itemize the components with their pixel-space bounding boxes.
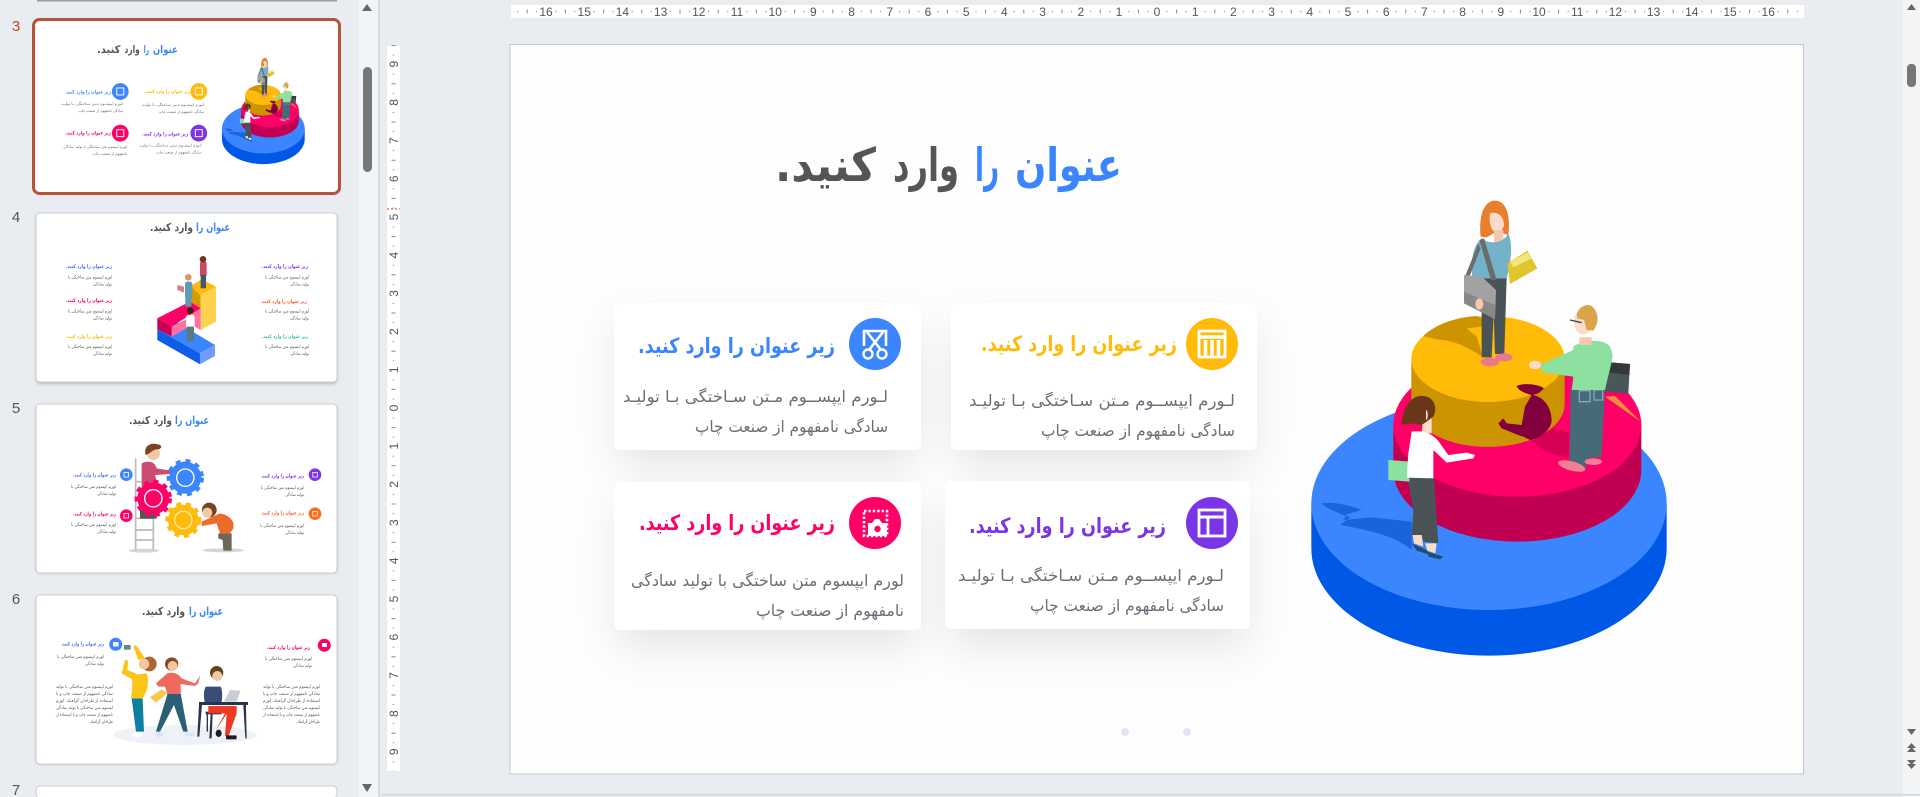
- thumbnail 7 partial: [36, 786, 337, 797]
- vertical ruler: 9: [387, 748, 401, 755]
- thumbnail 3: active slide: نامفهوم از صنعت چاپ: [93, 152, 127, 157]
- horizontal ruler: 15: [578, 5, 591, 19]
- vertical ruler: 6: [387, 175, 401, 182]
- panel: sidebar scrollbar: [359, 0, 380, 797]
- vertical ruler: 2: [387, 481, 401, 488]
- thumbnail 4: لورم ایپسوم متن ساختگی با: [68, 274, 112, 280]
- icon: gears, ladder and workers: [129, 444, 244, 553]
- thumbnail 6: استفاده از طراحان گرافیک. لورم: [263, 698, 320, 704]
- thumbnail 3: active slide: زیر عنوان را وارد کنید.: [65, 131, 111, 137]
- horizontal ruler: 6: [925, 5, 932, 19]
- card heading: زیر عنوان را وارد کنید.: [638, 334, 835, 358]
- vertical ruler: 9: [387, 61, 401, 68]
- vertical ruler: 0: [387, 404, 401, 411]
- thumbnail 4: لورم ایپسوم متن ساختگی با: [68, 344, 112, 350]
- thumbnail 6: سادگی نامفهوم از صنعت چاپ و با: [263, 691, 320, 697]
- thumbnail numbers: 3: [12, 18, 20, 35]
- thumbnail 4: تولید سادگی: [290, 282, 310, 288]
- vertical ruler: 7: [387, 672, 401, 679]
- thumbnail 3: active slide: سادگی نامفهوم از صنعت چاپ: [78, 108, 123, 114]
- icon: layout: [1186, 497, 1238, 549]
- thumbnail 6: وارد کنید.: [142, 605, 185, 618]
- thumbnail 4: لورم ایپسوم متن ساختگی با: [265, 274, 309, 280]
- panel: main slide canvas: [510, 44, 1804, 774]
- thumbnail 5: تولید سادگی: [97, 529, 117, 535]
- thumbnail 6: طراحان گرافیک.: [296, 719, 320, 725]
- thumbnail 4: [36, 213, 337, 384]
- thumbnail numbers: 6: [12, 591, 20, 608]
- horizontal ruler: 10: [769, 5, 782, 19]
- thumbnail 3: active slide: [34, 20, 340, 194]
- icon: isometric steps with people: [157, 256, 216, 364]
- person: man with laptop: [1529, 305, 1630, 474]
- horizontal ruler: 11: [1571, 5, 1584, 19]
- thumbnail 4: زیر عنوان را وارد کنید.: [262, 264, 308, 270]
- thumbnail 6: نامفهوم از صنعت چاپ و با استفاده از: [262, 713, 320, 718]
- thumbnail 6: ایپسوم متن ساختگی با تولید سادگی: [56, 705, 113, 711]
- thumbnail 5: زیر عنوان را وارد کنید.: [73, 512, 116, 518]
- horizontal ruler: [511, 5, 1804, 19]
- thumbnail 5: وارد کنید.: [129, 414, 172, 427]
- thumbnail 3: active slide: کنید.: [97, 43, 121, 56]
- horizontal ruler: 10: [1532, 5, 1546, 19]
- thumbnail 4: لورم ایپسوم متن ساختگی با: [265, 308, 309, 314]
- title: را: [975, 138, 999, 192]
- thumbnail 5: لورم ایپسوم متن ساختگی با: [71, 484, 116, 490]
- card heading: زیر عنوان را وارد کنید.: [981, 332, 1177, 356]
- horizontal ruler: 12: [1609, 5, 1622, 19]
- thumbnail 3: active slide: سادگی نامفهوم از صنعت چاپ: [159, 109, 204, 115]
- title: عنوان: [1015, 138, 1122, 192]
- thumbnail numbers: 4: [12, 209, 20, 226]
- card body text: نامفهوم از صنعت چاپ: [756, 601, 904, 621]
- thumbnail 4: عنوان را: [196, 221, 230, 234]
- thumbnail 4: زیر عنوان را وارد کنید.: [66, 334, 112, 340]
- horizontal ruler: 11: [731, 5, 744, 19]
- thumbnail 4: تولید سادگی: [93, 282, 113, 288]
- horizontal ruler: 14: [616, 5, 629, 19]
- thumbnail 6: تولید سادگی: [293, 663, 313, 669]
- panel: yellow card: [951, 303, 1257, 450]
- card body text: لـورم ایپســوم مـتن سـاختگی بـا تولیـد: [623, 387, 888, 407]
- horizontal ruler: 4: [1001, 5, 1008, 19]
- horizontal ruler: 13: [1647, 5, 1661, 19]
- card shadows: [620, 325, 1252, 645]
- vertical ruler: 7: [387, 137, 401, 144]
- thumbnail 5: زیر عنوان را وارد کنید.: [261, 474, 304, 480]
- vertical ruler: 1: [387, 366, 401, 373]
- horizontal ruler: 7: [886, 5, 893, 19]
- thumbnail 3: active slide: زیر عنوان را وارد کنید.: [65, 89, 111, 95]
- thumbnail 6: لورم ایپسوم متن ساختگی با تولید: [263, 684, 320, 690]
- thumbnail 4: تولید سادگی: [290, 316, 310, 322]
- card body text: [958, 566, 1224, 616]
- thumbnail 4: زیر عنوان را وارد کنید.: [66, 298, 112, 304]
- vertical ruler: 4: [387, 252, 401, 259]
- thumbnail 6: عنوان را: [189, 605, 223, 618]
- thumbnail 6: لورم ایپسوم متن ساختگی با تولید: [56, 684, 113, 690]
- vertical ruler: 8: [387, 99, 401, 106]
- thumbnail 6: نامفهوم از صنعت چاپ و با استفاده از: [55, 713, 113, 718]
- thumbnail numbers: 5: [12, 400, 20, 417]
- horizontal ruler: 3: [1268, 5, 1275, 19]
- title: [775, 138, 1122, 192]
- thumbnail 3: active slide: را: [144, 43, 149, 56]
- icon: three cartoon people: [113, 645, 257, 745]
- horizontal ruler: 2: [1077, 5, 1084, 19]
- panel: pink card: [614, 482, 921, 630]
- horizontal ruler: 9: [810, 5, 817, 19]
- vertical ruler: 8: [387, 710, 401, 717]
- card body text: لـورم ایپســوم مـتن سـاختگی بـا تولیـد: [969, 391, 1235, 411]
- pagination dots: [1121, 728, 1191, 736]
- vertical ruler: 4: [387, 557, 401, 564]
- thumbnail 3: active slide: زیر عنوان را وارد کنید.: [142, 131, 188, 137]
- thumbnail 3: active slide: لورم ایپسوم متن ساختگی با تولید سادگی: [63, 144, 127, 150]
- thumbnail 4: وارد کنید.: [150, 221, 193, 234]
- card body text: لـورم ایپســوم مـتن سـاختگی بـا تولیـد: [958, 566, 1224, 586]
- illustration: three-tier pyramid with people: [1311, 201, 1667, 656]
- person: woman with brown hair: [1388, 396, 1475, 559]
- horizontal ruler: 9: [1497, 5, 1504, 19]
- card body text: سادگی نامفهوم از صنعت چاپ: [695, 417, 888, 437]
- horizontal ruler: 6: [1383, 5, 1390, 19]
- title: کنید.: [775, 138, 876, 192]
- thumbnail 6: ایپسوم متن ساختگی با تولید سادگی: [263, 705, 320, 711]
- thumbnail 3: active slide: لـورم ایپســوم مـتن سـاختگی بـا تولیـد: [142, 102, 204, 108]
- card body text: [623, 387, 888, 437]
- horizontal ruler: 16: [1762, 5, 1775, 19]
- vertical ruler: 5: [387, 213, 401, 220]
- card heading: زیر عنوان را وارد کنید.: [969, 514, 1166, 538]
- thumbnail 6: لورم ایپسوم متن ساختگی با: [265, 656, 312, 662]
- horizontal ruler: 1: [1192, 5, 1199, 19]
- card body text: [631, 571, 904, 621]
- horizontal ruler: 5: [963, 5, 970, 19]
- horizontal ruler: 8: [1459, 5, 1466, 19]
- card body text: سادگی نامفهوم از صنعت چاپ: [1030, 596, 1224, 616]
- thumbnail 4: لورم ایپسوم متن ساختگی با: [265, 344, 309, 350]
- vertical ruler: 6: [387, 634, 401, 641]
- thumbnail 6: سادگی نامفهوم از صنعت چاپ و با: [56, 691, 113, 697]
- horizontal ruler: 1: [1116, 5, 1123, 19]
- thumbnail 5: [36, 404, 337, 573]
- icon: table layout: [1186, 318, 1238, 370]
- horizontal ruler: 14: [1685, 5, 1699, 19]
- card body text: لورم ایپسوم متن ساختگی با تولید سادگی: [631, 571, 904, 591]
- thumbnail 3: active slide: لـورم ایپســوم مـتن سـاختگی بـا تولیـد: [62, 101, 123, 107]
- thumbnail numbers: [12, 18, 20, 797]
- thumbnail 3: active slide: عنوان: [153, 43, 178, 56]
- horizontal ruler: 2: [1230, 5, 1237, 19]
- thumbnail 6: لورم ایپسوم متن ساختگی با: [57, 654, 104, 660]
- horizontal ruler: 8: [848, 5, 855, 19]
- horizontal ruler: 12: [692, 5, 706, 19]
- vertical ruler: 3: [387, 519, 401, 526]
- thumbnail 4: زیر عنوان را وارد کنید.: [66, 264, 112, 270]
- thumbnail 5: تولید سادگی: [285, 492, 305, 498]
- thumbnail 4: تولید سادگی: [290, 351, 310, 357]
- thumbnail 5: زیر عنوان را وارد کنید.: [261, 510, 304, 516]
- card body text: [969, 391, 1235, 441]
- thumbnail 4: تولید سادگی: [93, 316, 113, 322]
- thumbnail 5: عنوان را: [175, 414, 209, 427]
- thumbnail 3: active slide: لـورم ایپســوم مـتن سـاختگی بـا تولیـد: [140, 143, 202, 149]
- thumbnail 3: active slide: سادگی نامفهوم از صنعت چاپ: [156, 150, 202, 156]
- thumbnail 3: active slide: وارد: [124, 43, 140, 56]
- vertical ruler: 5: [387, 595, 401, 602]
- thumbnail 4: زیر عنوان را وارد کنید.: [262, 334, 308, 340]
- thumbnail 4: زیر عنوان را وارد کنید.: [261, 299, 307, 305]
- vertical ruler: 1: [387, 443, 401, 450]
- horizontal ruler: 5: [1345, 5, 1352, 19]
- thumbnail 4: لورم ایپسوم متن ساختگی با: [68, 308, 112, 314]
- vertical ruler: [387, 45, 401, 771]
- vertical ruler: 3: [387, 290, 401, 297]
- horizontal ruler: 13: [654, 5, 668, 19]
- horizontal ruler: 0: [1154, 5, 1161, 19]
- icon: camera frame: [849, 497, 901, 549]
- icon: scissors: [849, 318, 901, 370]
- thumbnail 6: استفاده از طراحان گرافیک. لورم: [56, 698, 113, 704]
- panel: purple card: [945, 481, 1250, 629]
- thumbnail 5: لورم ایپسوم متن ساختگی با: [261, 485, 304, 491]
- vertical ruler: 2: [387, 328, 401, 335]
- title: وارد: [893, 138, 959, 192]
- thumbnail 6: طراحان گرافیک.: [89, 719, 113, 725]
- horizontal ruler: 15: [1723, 5, 1737, 19]
- thumbnail 5: لورم ایپسوم متن ساختگی با: [71, 522, 116, 528]
- thumbnail 3: active slide: زیر عنوان را وارد کنید.: [145, 89, 191, 95]
- thumbnail 5: تولید سادگی: [285, 530, 305, 536]
- card heading: زیر عنوان را وارد کنید.: [639, 511, 835, 535]
- thumbnail 6: زیر عنوان را وارد کنید.: [61, 642, 104, 648]
- panel: blue card: [614, 303, 921, 450]
- person: woman with red hair: [1464, 201, 1537, 366]
- horizontal ruler: 3: [1039, 5, 1046, 19]
- thumbnail 5: تولید سادگی: [97, 491, 117, 497]
- thumbnail 6: زیر عنوان را وارد کنید.: [267, 645, 310, 651]
- thumbnail 6: [36, 595, 337, 764]
- thumbnail 6: تولید سادگی: [85, 661, 105, 667]
- thumbnail 5: زیر عنوان را وارد کنید.: [73, 472, 116, 478]
- panel: slide thumbnails sidebar: [12, 18, 340, 797]
- thumbnail 5: لورم ایپسوم متن ساختگی با: [260, 523, 304, 529]
- horizontal ruler: 4: [1306, 5, 1313, 19]
- card body text: سادگی نامفهوم از صنعت چاپ: [1041, 421, 1235, 441]
- horizontal ruler: 16: [539, 5, 553, 19]
- thumbnail 4: تولید سادگی: [93, 351, 113, 357]
- horizontal ruler: 7: [1421, 5, 1428, 19]
